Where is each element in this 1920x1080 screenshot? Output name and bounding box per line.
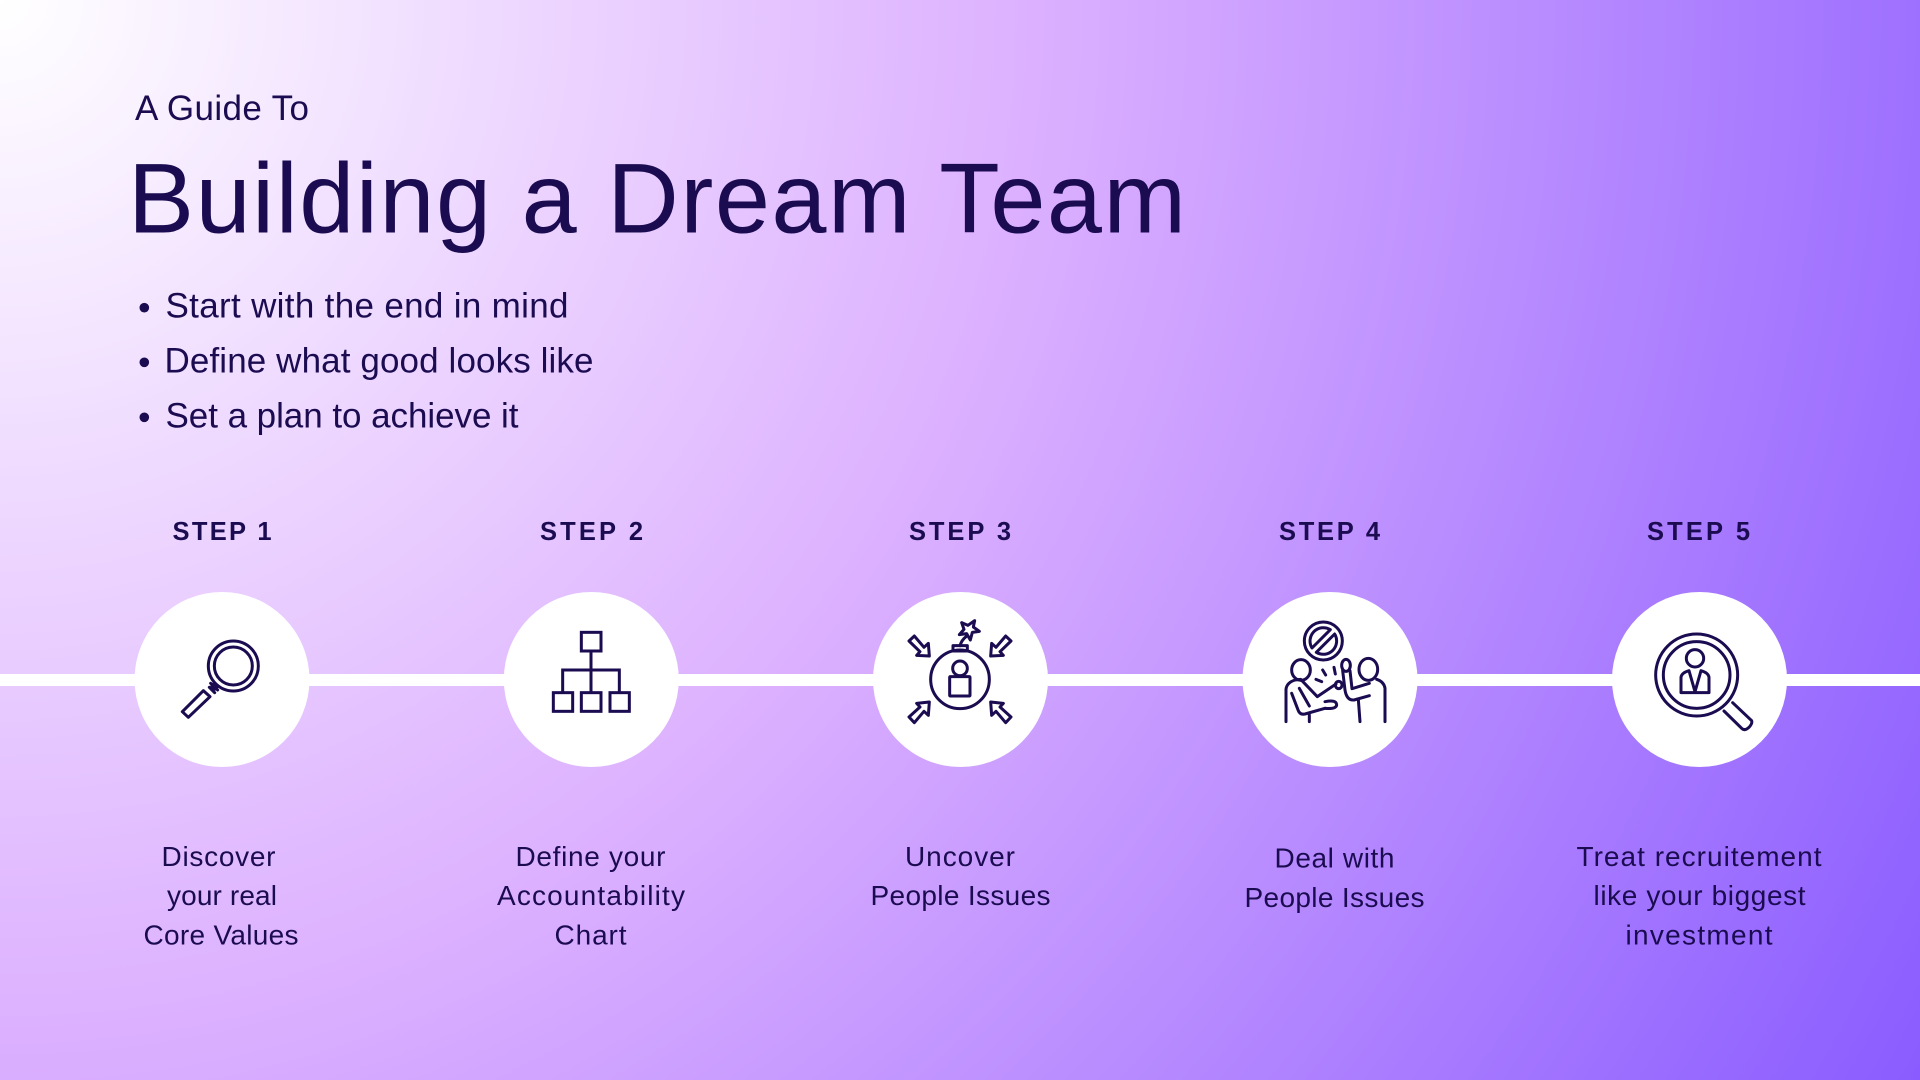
title: Building a Dream Team bbox=[128, 142, 1186, 254]
step 5 description: like your biggest bbox=[1594, 880, 1806, 911]
step 4 description bbox=[1244, 842, 1424, 913]
step 5 description: investment bbox=[1626, 919, 1773, 950]
step 5 bbox=[1576, 518, 1822, 950]
bullet 2: Define what good looks like bbox=[164, 341, 594, 380]
step 5 circle bbox=[1612, 592, 1787, 767]
step 2 bbox=[497, 518, 685, 950]
step 4 bbox=[1242, 518, 1424, 913]
bullet 3: Set a plan to achieve it bbox=[166, 396, 519, 435]
timeline line bbox=[0, 674, 1920, 686]
step 1 bbox=[134, 518, 310, 950]
step 1 circle bbox=[134, 592, 310, 767]
step 2 description: Define your bbox=[516, 841, 666, 872]
step 4 label: STEP 4 bbox=[1279, 518, 1381, 546]
step 3 description: Uncover bbox=[905, 841, 1015, 872]
step 3 label: STEP 3 bbox=[909, 518, 1011, 546]
icon: org chart bbox=[553, 632, 629, 711]
step 2 label: STEP 2 bbox=[540, 518, 643, 546]
step 2 description: Accountability bbox=[497, 880, 685, 911]
eyebrow: A Guide To: A Guide To bbox=[135, 89, 309, 128]
step 3 bbox=[870, 518, 1050, 911]
step 4 description: Deal with bbox=[1274, 842, 1394, 873]
step 3 description: People Issues bbox=[870, 880, 1050, 911]
step 2 description bbox=[497, 841, 685, 950]
bullet 1: Start with the end in mind bbox=[166, 286, 568, 325]
step 1 description: Discover bbox=[162, 841, 276, 872]
step 3 circle bbox=[873, 592, 1048, 767]
step 5 label: STEP 5 bbox=[1647, 518, 1750, 546]
bullet list bbox=[140, 286, 594, 435]
step 4 description: People Issues bbox=[1244, 882, 1424, 913]
icon: magnifier over person bbox=[1656, 634, 1752, 730]
step 4 circle bbox=[1242, 592, 1418, 767]
step 1 description bbox=[144, 841, 298, 950]
step 5 description: Treat recruitement bbox=[1576, 841, 1822, 872]
icon: person in bomb with arrows bbox=[909, 621, 1011, 723]
icon: magnifying glass bbox=[182, 641, 258, 717]
step 5 description bbox=[1576, 841, 1822, 950]
step 2 circle bbox=[504, 592, 679, 767]
step 1 label: STEP 1 bbox=[172, 518, 272, 546]
step 3 description bbox=[870, 841, 1050, 911]
step 1 description: Core Values bbox=[144, 919, 298, 950]
step 2 description: Chart bbox=[554, 919, 627, 950]
icon: two people arguing bbox=[1286, 622, 1385, 722]
step 1 description: your real bbox=[167, 880, 277, 911]
